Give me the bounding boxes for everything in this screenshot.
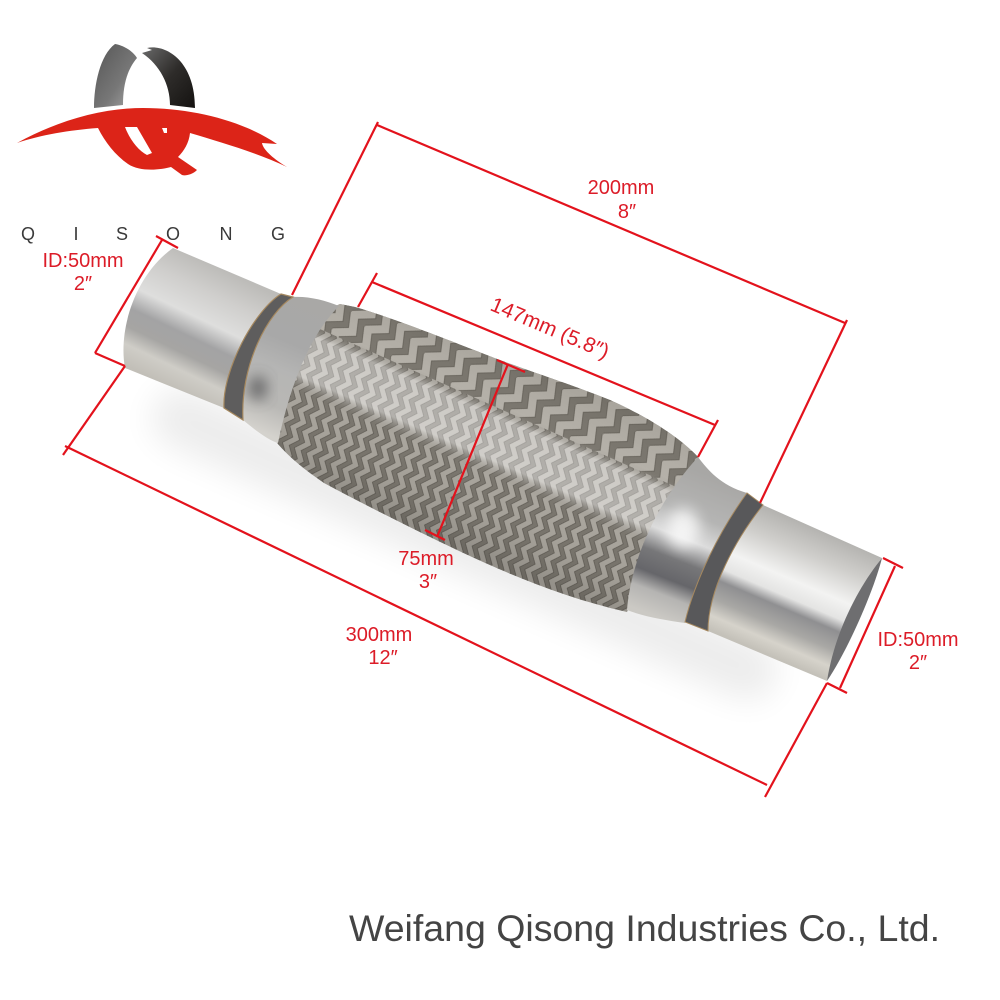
- label: right ID: ID:50mm: [877, 629, 959, 651]
- label: 200mm: 200mm: [588, 177, 654, 199]
- label: 200mm: [588, 177, 654, 223]
- dimension: right inner diameter: [827, 558, 903, 693]
- label: left ID: [42, 250, 124, 295]
- right weld bead: [685, 493, 763, 631]
- label: 147mm: 147mm (5.8″): [487, 293, 613, 364]
- logo: Qisong emblem: [17, 44, 287, 175]
- logo wordmark: QISONG: QISONG: [21, 224, 285, 244]
- label: 75mm: 75mm: [398, 548, 454, 570]
- dimension: overall length 300mm: [63, 366, 827, 797]
- dimension: left inner diameter: [95, 236, 178, 366]
- pipe opening: [827, 558, 882, 681]
- label: 300mm: 12″: [368, 647, 398, 669]
- label: left ID: 2″: [74, 273, 92, 295]
- right pipe end: [708, 505, 882, 681]
- dimension: 147mm braid length: [358, 273, 718, 457]
- label: right ID: [877, 629, 959, 674]
- left weld bead: [224, 294, 293, 420]
- drop shadow: [142, 379, 788, 710]
- label: 200mm: 8″: [618, 201, 636, 223]
- label: right ID: 2″: [909, 652, 927, 674]
- product photo: flexible exhaust pipe: [123, 240, 882, 710]
- braided centre section: [276, 304, 698, 612]
- right collar: [627, 457, 747, 623]
- label: 75mm: [398, 548, 454, 593]
- left pipe end: [123, 248, 281, 408]
- dimension: 75mm braid diameter: [425, 360, 525, 540]
- label: 75mm: 3″: [419, 571, 437, 593]
- label: 300mm: 300mm: [346, 624, 412, 646]
- left collar: [243, 297, 339, 443]
- footer company name: Weifang Qisong Industries Co., Ltd.: [349, 908, 940, 949]
- dimension: 200mm: [292, 122, 847, 503]
- label: left ID: ID:50mm: [42, 250, 124, 272]
- label: 300mm: [346, 624, 412, 669]
